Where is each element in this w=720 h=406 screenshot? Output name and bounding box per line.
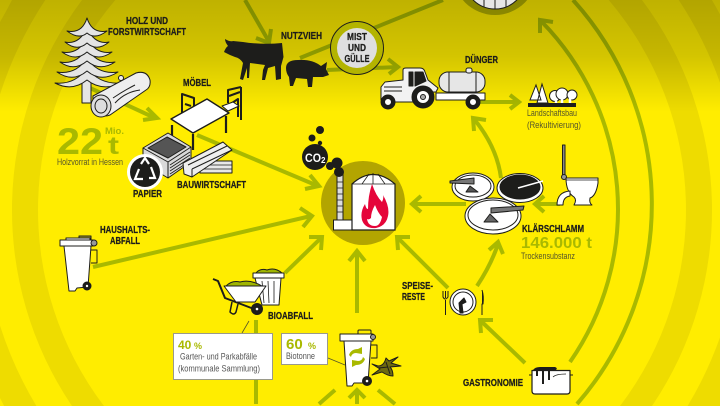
label: Haushaltsabfall — [100, 225, 150, 247]
stat: 22 Mio. t: Holzvorrat in Hessen — [57, 157, 123, 168]
icon: Mist und Gülle — [330, 22, 384, 74]
icon: tractor with tank — [381, 68, 485, 109]
label: Speisereste: RESTE — [402, 292, 425, 303]
heading: Holz und Forstwirtschaft: HOLZ UND — [126, 16, 168, 27]
label: Speisereste — [402, 281, 433, 303]
callout: 40 percent: 40 — [178, 338, 192, 352]
icon: cow — [224, 39, 284, 80]
label: Haushaltsabfall: ABFALL — [110, 236, 140, 247]
label: Möbel: MÖBEL — [183, 76, 211, 89]
callout: 60 percent — [282, 334, 328, 364]
callout: 60 percent: 60 — [286, 336, 303, 353]
callout: 60 percent: Biotonne — [286, 351, 315, 362]
icon: top silo ring — [453, 0, 537, 15]
icon: banana peel — [372, 357, 401, 376]
icon: CO2 smoke: 2 — [321, 156, 326, 165]
stat: Klärschlamm: Trockensubstanz — [521, 251, 575, 262]
icon: pig — [286, 60, 329, 87]
stat: 22 Mio. t: 22 — [57, 121, 103, 162]
icon: paper stack — [143, 133, 191, 178]
label: Speisereste: SPEISE- — [402, 281, 433, 292]
stat: Klärschlamm: 146.000 t — [521, 235, 592, 252]
icon: Mist und Gülle: MIST — [347, 32, 367, 43]
icon: top silo dome — [464, 0, 526, 9]
icon: organic bin — [340, 330, 377, 386]
callout: 40 percent — [174, 334, 272, 380]
icon: CO2 smoke: CO — [305, 151, 321, 165]
icon: wheelbarrow and container — [213, 269, 284, 314]
icon: central biomass plant — [321, 161, 405, 245]
icon: clarifier tanks — [450, 173, 543, 234]
callout: 40 percent: Garten- und Parkabfälle — [180, 352, 257, 362]
icon: recycling badge — [127, 154, 163, 190]
text: Landschaftsbau: (Rekultivierung) — [527, 120, 581, 131]
icon: fir tree — [55, 18, 122, 103]
callout: 40 percent: % — [194, 341, 202, 351]
icon: Mist und Gülle: UND — [348, 43, 366, 54]
heading: Holz und Forstwirtschaft: FORSTWIRTSCHAFT — [108, 27, 186, 38]
icon: timber — [183, 142, 232, 177]
icon: plate and cutlery — [443, 289, 483, 315]
stat: Klärschlamm: KLÄRSCHLAMM — [522, 222, 584, 235]
text: Landschaftsbau — [527, 108, 581, 131]
label: Bauwirtschaft: BAUWIRTSCHAFT — [177, 180, 246, 191]
callout: 60 percent: % — [308, 341, 316, 351]
label: Gastronomie: GASTRONOMIE — [463, 378, 523, 389]
callout: 40 percent: (kommunale Sammlung) — [178, 364, 260, 374]
icon: log — [91, 72, 150, 117]
stat: Klärschlamm — [521, 222, 592, 262]
label: Papier: PAPIER — [133, 189, 163, 200]
stat: 22 Mio. t: t — [108, 132, 120, 160]
heading: Holz und Forstwirtschaft — [108, 16, 186, 38]
icon: landscape — [528, 84, 577, 107]
icon: furniture — [171, 87, 241, 150]
icon: flame — [361, 184, 388, 228]
leader lines — [242, 321, 345, 365]
label: Dünger: DÜNGER — [465, 53, 499, 66]
icon: cooking pot — [529, 367, 573, 394]
stat: 22 Mio. t: Mio. — [105, 126, 124, 136]
text: Landschaftsbau: Landschaftsbau — [527, 108, 577, 119]
icon: Mist und Gülle: GÜLLE — [344, 52, 370, 65]
icon: toilet — [557, 145, 598, 205]
icon: CO2 smoke — [302, 126, 344, 177]
icon: household bin — [60, 236, 97, 291]
label: Nutzvieh: NUTZVIEH — [281, 31, 322, 42]
label: Haushaltsabfall: HAUSHALTS- — [100, 225, 150, 236]
label: Bioabfall: BIOABFALL — [268, 311, 313, 322]
stat: 22 Mio. t — [57, 121, 124, 168]
arrows — [90, 0, 652, 404]
